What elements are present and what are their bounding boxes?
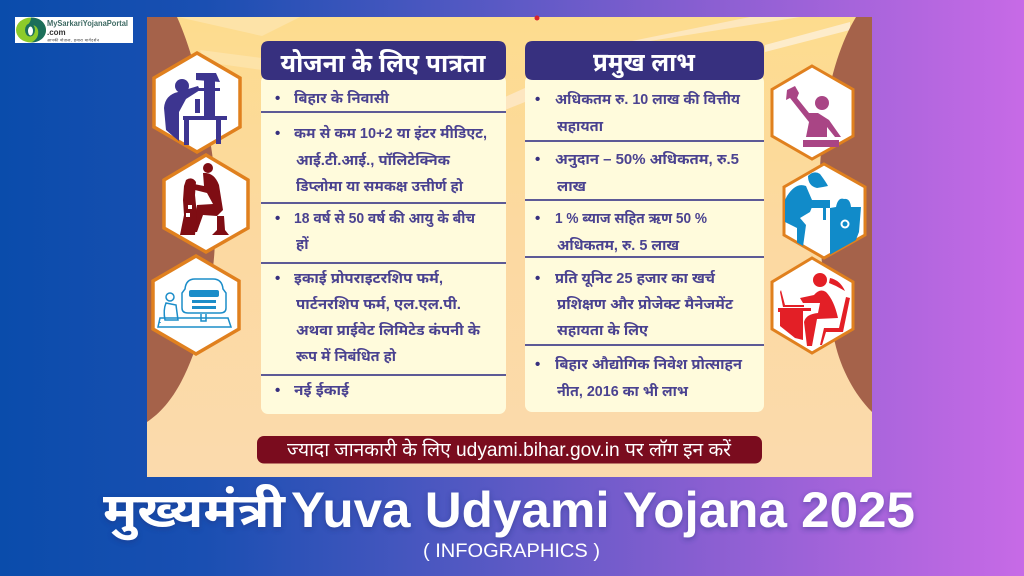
eligibility items: 18 वर्ष से 50 वर्ष की आयु के बीच (294, 209, 476, 228)
benefits items: लाख (557, 179, 586, 195)
benefits items: सहायता (557, 119, 604, 135)
eligibility items: बिहार के निवासी (294, 89, 390, 107)
hexagon icon: hammer worker (772, 66, 853, 159)
benefits items: अनुदान – 50% अधिकतम, रु.5 (555, 151, 739, 169)
eligibility body (261, 75, 506, 414)
logo: .com (47, 28, 66, 37)
benefits items: • (535, 91, 540, 108)
eligibility items: आई.टी.आई., पॉलिटेक्निक (296, 151, 451, 169)
benefits items: नीत, 2016 का भी लाभ (557, 383, 689, 400)
eligibility items: • (275, 382, 280, 399)
eligibility items: • (275, 210, 280, 227)
hexagon icon: sewing worker (784, 164, 865, 258)
eligibility items: • (275, 90, 280, 107)
subtitle: ( INFOGRAPHICS ) (423, 540, 600, 562)
benefits heading: प्रमुख लाभ (593, 47, 696, 78)
eligibility items: हों (296, 236, 309, 253)
title: मुख्यमंत्री (103, 484, 286, 540)
brown curtain right (819, 17, 872, 412)
eligibility items (275, 89, 487, 399)
panel: benefits (525, 41, 764, 412)
benefits items: • (535, 356, 540, 373)
red dot (534, 16, 540, 20)
footer call to action: ज्यादा जानकारी के लिए udyami.bihar.gov.in पर लॉग इन करें (287, 438, 732, 461)
benefits items: प्रति यूनिट 25 हजार का खर्च (555, 270, 716, 288)
eligibility items: कम से कम 10+2 या इंटर मीडिएट, (294, 124, 487, 142)
eligibility items: नई ईकाई (294, 382, 350, 399)
panel: eligibility (261, 41, 506, 414)
eligibility items: डिप्लोमा या समकक्ष उत्तीर्ण हो (296, 178, 464, 195)
eligibility items: पार्टनरशिप फर्म, एल.एल.पी. (296, 296, 461, 313)
logo: आपकी योजना, हमारा मार्गदर्शन (47, 38, 100, 42)
eligibility heading (261, 41, 506, 80)
brown curtain left (147, 17, 216, 422)
benefits items: • (535, 151, 540, 168)
eligibility items: अथवा प्राईवेट लिमिटेड कंपनी के (296, 321, 481, 339)
benefits items: 1 % ब्याज सहित ऋण 50 % (555, 210, 707, 227)
title: Yuva Udyami Yojana 2025 (291, 482, 915, 538)
title: Yuva Udyami Yojana 2025 (291, 484, 915, 540)
title: मुख्यमंत्री (103, 486, 286, 542)
benefits items: बिहार औद्योगिक निवेश प्रोत्साहन (555, 355, 743, 373)
hexagon icon: cobbler (164, 155, 248, 252)
hexagon icon: car mechanic (153, 256, 239, 354)
benefits items: अधिकतम रु. 10 लाख की वित्तीय (555, 91, 741, 108)
infographic poster (147, 16, 872, 477)
benefits items: सहायता के लिए (557, 321, 649, 339)
logo: MySarkariYojanaPortal (47, 19, 128, 28)
benefits items: • (535, 270, 540, 287)
eligibility items: • (275, 125, 280, 142)
eligibility items: इकाई प्रोपराइटरशिप फर्म, (294, 270, 443, 287)
eligibility items: रूप में निबंधित हो (296, 348, 397, 365)
light rays (178, 17, 300, 36)
eligibility heading: योजना के लिए पात्रता (280, 48, 487, 78)
benefits heading (525, 41, 764, 80)
hexagon icon: drill press worker (154, 53, 240, 152)
benefits items (535, 91, 743, 400)
poster background (147, 17, 872, 477)
logo (15, 17, 133, 43)
benefits items: अधिकतम, रु. 5 लाख (557, 237, 679, 254)
benefits items: • (535, 210, 540, 227)
footer call to action (257, 436, 762, 464)
benefits items: प्रशिक्षण और प्रोजेक्ट मैनेजमेंट (557, 295, 733, 313)
hexagon icon: laptop worker (772, 258, 853, 353)
eligibility items: • (275, 270, 280, 287)
benefits body (525, 75, 764, 412)
